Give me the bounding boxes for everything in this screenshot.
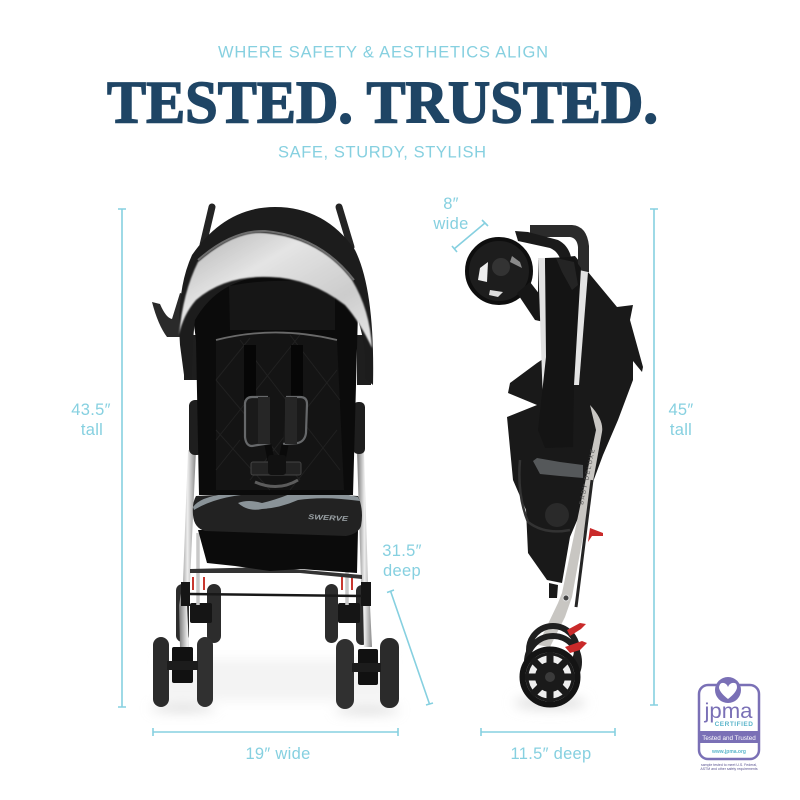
headrest panel: [229, 281, 335, 330]
badge url: www.jpma.org: [711, 749, 746, 755]
folded link: [517, 282, 544, 322]
footrest with swoosh: SWERVE: [308, 514, 349, 523]
folded side view stroller: [467, 225, 643, 709]
front stroller height dimension: [71, 209, 126, 707]
folded stroller width dimension: 8″: [443, 195, 459, 213]
cup holder: [152, 293, 186, 337]
quilted backrest: [216, 331, 344, 490]
handle: [530, 225, 589, 272]
JPMA certified badge: ASTM and other safety requirements: [700, 767, 758, 771]
folded stroller height dimension: [650, 209, 694, 705]
seat interior: [192, 275, 358, 495]
folded stroller height dimension: tall: [670, 421, 692, 439]
front stroller height dimension: tall: [81, 421, 103, 439]
subheading: SAFE, STURDY, STYLISH: [278, 144, 486, 162]
red pedals: [555, 528, 603, 665]
folded stroller width dimension: wide: [432, 215, 469, 233]
storage basket: [198, 530, 358, 573]
title: TESTED. TRUSTED.: [107, 70, 658, 136]
front stroller width dimension: [153, 728, 398, 763]
badge fine print: sample tested to meet U.S. Federal,: [701, 763, 757, 767]
footrest with swoosh: [193, 493, 362, 536]
rear wheels: [527, 626, 579, 688]
folded stroller depth dimension: 11.5″ deep: [510, 745, 592, 763]
cross bars: [190, 594, 362, 596]
side frame lettering: BABY DELUXE: [579, 447, 597, 505]
side arms: [184, 335, 371, 455]
front stroller depth dimension: [382, 542, 433, 705]
badge heart icon: [715, 677, 741, 703]
folded canopy: [538, 257, 581, 448]
front stroller height dimension: 43.5″: [71, 401, 111, 419]
folded stroller depth dimension: [481, 728, 615, 763]
folded body silhouette: [507, 256, 643, 583]
JPMA certified badge: [699, 677, 759, 771]
harness straps: [245, 397, 307, 487]
front view stroller: [151, 207, 399, 712]
brake rod: [576, 480, 592, 607]
badge certified: CERTIFIED: [715, 721, 753, 728]
folded stroller width dimension: [432, 195, 488, 252]
front stroller depth dimension: deep: [383, 562, 421, 580]
stroller handles: [203, 207, 351, 247]
ground shadow: [151, 660, 399, 712]
silver frame: [538, 258, 549, 405]
front stroller depth dimension: 31.5″: [382, 542, 422, 560]
front wheels: [153, 637, 399, 709]
folded stroller height dimension: 45″: [668, 401, 694, 419]
folded wheel: [467, 239, 531, 303]
canopy outer shell: [179, 207, 373, 385]
badge logotype: jpma: [703, 700, 753, 723]
frame tubes: [179, 450, 372, 647]
eyebrow heading: WHERE SAFETY & AESTHETICS ALIGN: [218, 44, 548, 62]
badge band: [699, 731, 759, 743]
canopy silver lining: [179, 233, 372, 348]
JPMA certified badge: Tested and Trusted: [702, 735, 756, 742]
rear wheels: [176, 533, 368, 645]
front stroller width dimension: 19″ wide: [245, 745, 311, 763]
ground shadow: [514, 697, 586, 709]
bracket: [533, 458, 583, 478]
axle joint: [549, 583, 569, 601]
canopy piping: [198, 231, 354, 280]
main front wheel: [522, 650, 578, 704]
